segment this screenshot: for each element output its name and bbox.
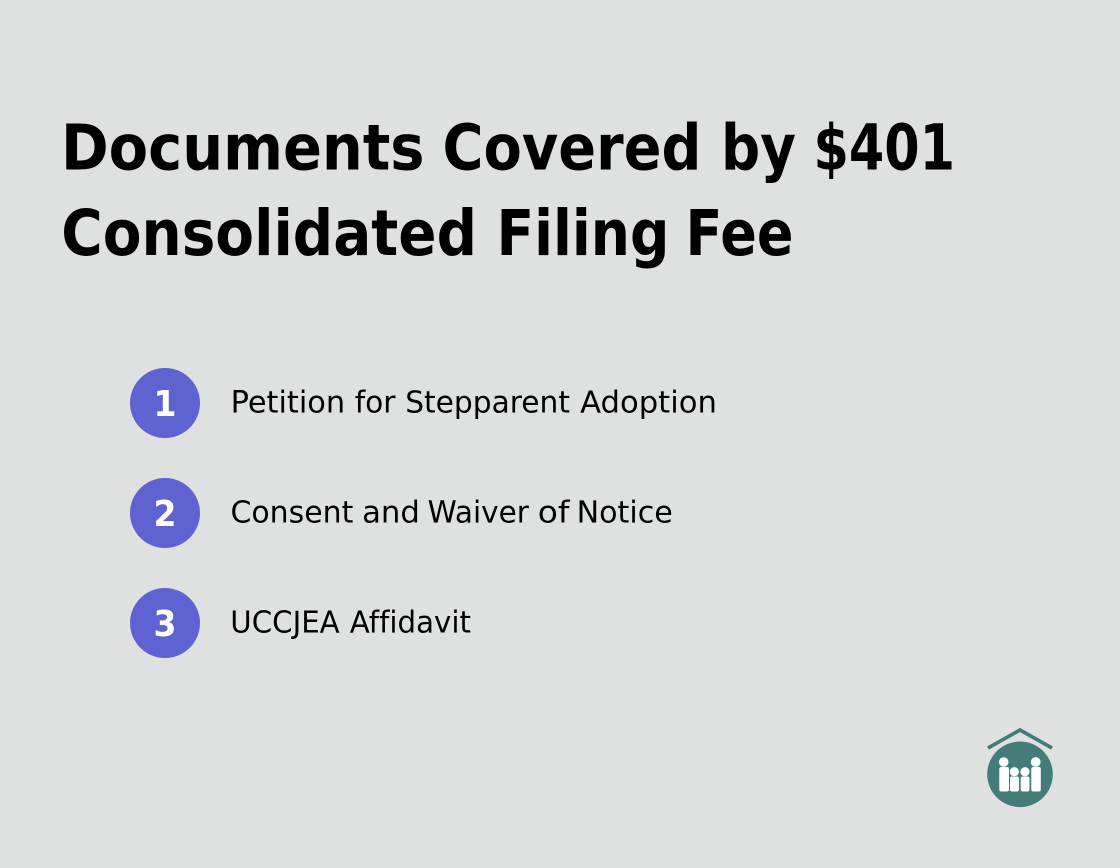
list item 3 — [130, 588, 471, 658]
list item 1: Petition — [231, 386, 345, 420]
title: Filing — [496, 197, 670, 270]
list item 1: Adoption — [580, 386, 717, 420]
list item 1: 1 — [154, 384, 176, 425]
title: Documents — [61, 112, 424, 184]
list item 1 — [130, 368, 717, 438]
list item 3: UCCJEA — [230, 606, 340, 640]
title — [61, 112, 955, 270]
title: Covered — [442, 112, 702, 184]
title: Consolidated — [61, 197, 477, 270]
list item 1: Stepparent — [405, 386, 570, 420]
list item 2: Notice — [577, 496, 673, 530]
title: Fee — [686, 197, 794, 270]
title: by — [721, 112, 796, 184]
list item 3: Affidavit — [350, 606, 471, 640]
list item 1: for — [355, 386, 396, 420]
list item 3: 3 — [154, 604, 176, 645]
list item 2: 2 — [154, 494, 176, 535]
list item 2: and — [362, 496, 420, 530]
list item 2: Waiver — [428, 496, 530, 530]
title: $401 — [814, 112, 955, 184]
icon: house and family logo — [987, 730, 1053, 807]
list item 2: Consent — [230, 496, 354, 530]
list item 2: of — [538, 496, 571, 530]
list item 2 — [130, 478, 673, 548]
